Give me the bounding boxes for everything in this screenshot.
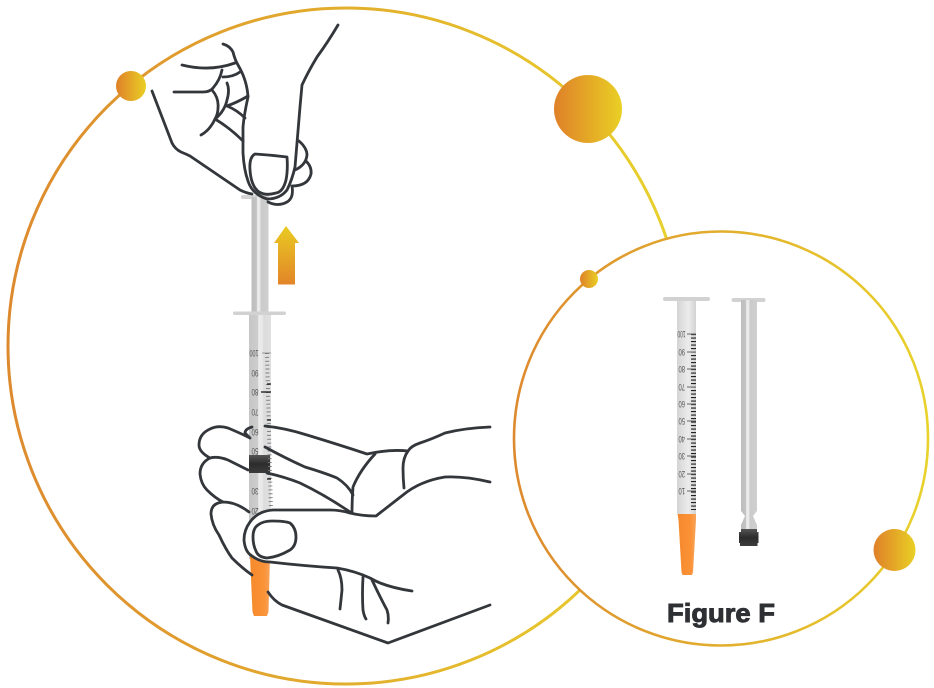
large circle outline: [8, 8, 684, 684]
scale ticks: [687, 334, 696, 510]
finger tip two: [200, 457, 248, 502]
plunger flange: [732, 298, 766, 302]
accent dot: large top right: [554, 75, 622, 143]
scale numbers: 20: [252, 506, 258, 516]
black stopper: [739, 529, 758, 546]
accent dot: inset top left: [580, 270, 598, 288]
curled fingers behind: [268, 141, 311, 204]
scale numbers: 50: [678, 416, 685, 426]
back of hand outline: [152, 91, 252, 194]
scale numbers: 20: [678, 469, 685, 479]
scale numbers: 40: [678, 434, 685, 444]
syringe held in hand: [233, 195, 286, 616]
scale numbers: 80: [252, 387, 258, 397]
scale numbers: 90: [252, 368, 258, 378]
separate syringe barrel: [663, 297, 710, 575]
separate plunger: [732, 298, 766, 546]
upward arrow: [274, 226, 299, 284]
barrel flange: [663, 297, 710, 301]
scale numbers: 100: [678, 329, 686, 339]
thumbnail: [250, 154, 287, 194]
orange tip: [250, 556, 270, 616]
top hand pinching plunger: [152, 25, 338, 204]
stopper: [249, 455, 270, 473]
accent dot: top left: [116, 71, 146, 101]
knuckle creases: [174, 63, 248, 141]
barrel: [249, 313, 271, 559]
scale numbers: 80: [678, 364, 685, 374]
index finger: [265, 426, 490, 454]
bottom hand holding barrel: [199, 426, 490, 643]
scale numbers: 30: [678, 451, 685, 461]
hand upper edge: [350, 477, 490, 516]
scale numbers: 70: [252, 407, 258, 417]
scale numbers: 10: [678, 486, 685, 496]
scale numbers: 60: [252, 427, 258, 437]
palm creases: [352, 451, 408, 512]
wrist creases: [338, 570, 388, 623]
scale numbers: 60: [678, 399, 685, 409]
middle finger lines: [265, 447, 353, 512]
thumbnail: [253, 521, 296, 558]
scale numbers: 30: [252, 486, 258, 496]
caption: Figure F: [667, 598, 775, 628]
accent dot: inset bottom right: [874, 529, 916, 571]
orange tip: [678, 514, 696, 575]
scale numbers: 90: [678, 347, 685, 357]
finger tip three: [211, 502, 252, 575]
scale numbers: 70: [678, 382, 685, 392]
scale numbers: [250, 348, 258, 516]
finger tip one: [199, 427, 252, 458]
finger and thumb outline: [223, 25, 338, 199]
inset circle outline: [514, 232, 928, 646]
scale numbers: [678, 329, 686, 496]
thumb: [244, 510, 412, 591]
scale ticks: [261, 353, 271, 512]
barrel flange: [233, 312, 286, 315]
scale numbers: 50: [252, 446, 258, 456]
barrel body: [677, 299, 696, 514]
lower edge: [268, 592, 490, 643]
scale numbers: 100: [250, 348, 258, 358]
plunger: [241, 195, 269, 315]
plunger shaft: [741, 300, 757, 530]
